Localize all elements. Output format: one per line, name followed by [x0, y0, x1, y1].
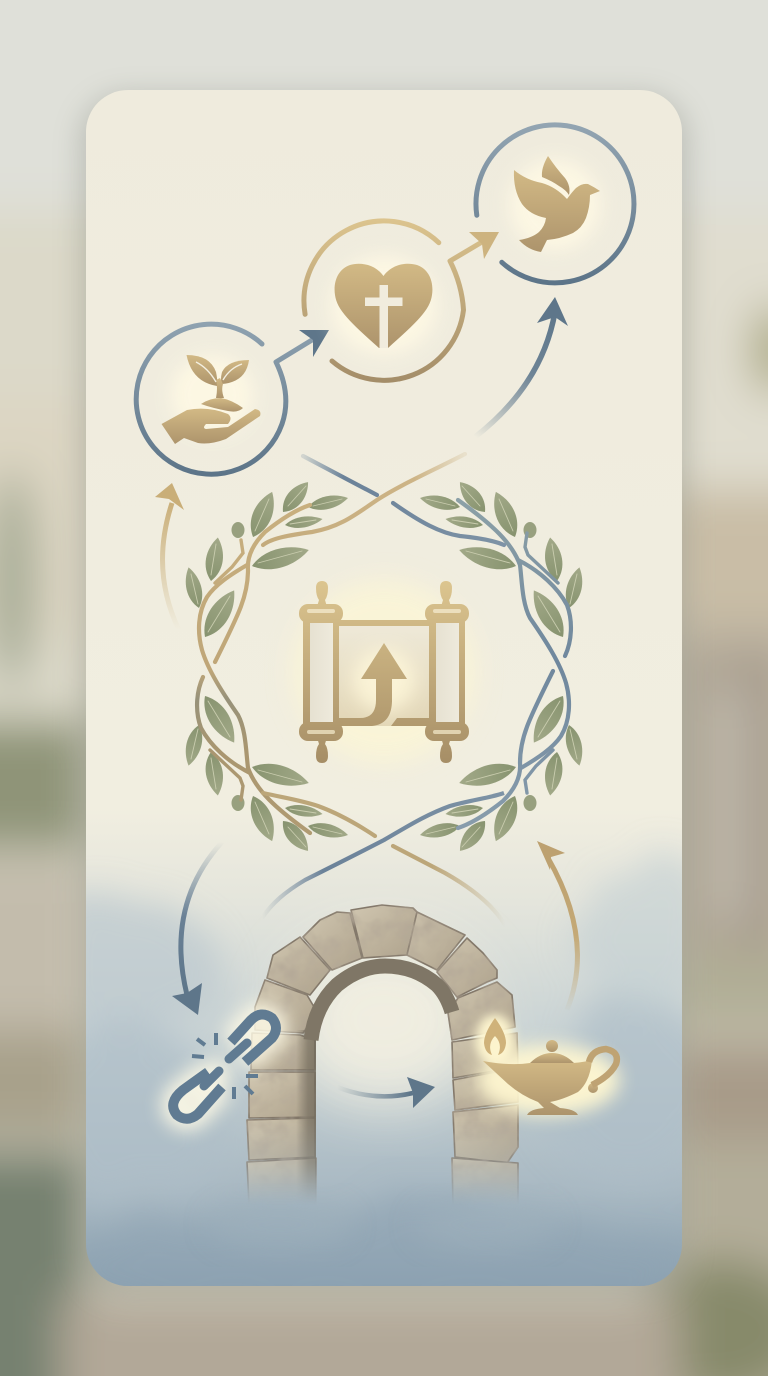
- arrowhead two: [469, 232, 499, 259]
- ring and arrow one: [136, 324, 312, 474]
- circle two: heart with cross: [304, 221, 499, 380]
- arrow on scroll: [361, 643, 407, 702]
- card shadow: [80, 94, 688, 1298]
- gold vines left: [197, 505, 310, 833]
- icon: heart: [335, 264, 432, 348]
- ring three: [476, 125, 634, 283]
- arch inner shadow: [298, 1030, 316, 1194]
- icon: oil lamp: [475, 1014, 620, 1116]
- blue ribbon top: [303, 456, 504, 545]
- central scroll: [292, 580, 476, 764]
- stone arch: [247, 905, 518, 1205]
- curved arrow to dove: [475, 297, 568, 437]
- sparks: [192, 1033, 258, 1099]
- fog clouds: [86, 847, 682, 1232]
- gold ribbon top: [263, 454, 465, 545]
- curved arrow to sprout circle: [155, 483, 184, 630]
- ribbons and wreath: [181, 454, 587, 925]
- icon: cross: [365, 285, 402, 348]
- blue vines right: [458, 500, 571, 828]
- panel: main card: [86, 90, 682, 1286]
- right roller: [425, 581, 469, 763]
- icon: broken chain: [173, 1014, 276, 1119]
- lamp body: [483, 1040, 598, 1115]
- gold ribbon bottom: [263, 793, 505, 925]
- ring and arrow two: [304, 221, 482, 380]
- icon: sprout and hand: [162, 355, 260, 444]
- olive leaves: [181, 477, 587, 856]
- circle three: dove: [476, 125, 634, 283]
- left roller: [299, 581, 343, 763]
- light glow inside arch: [284, 935, 484, 1105]
- curved arrow to broken chain: [172, 842, 222, 1015]
- blue ribbon bottom: [262, 793, 504, 918]
- flame: [484, 1018, 506, 1055]
- icon: dove: [514, 156, 600, 252]
- circle one: sprout in hand: [136, 324, 329, 474]
- upper link: [231, 1014, 276, 1062]
- arrowhead one: [299, 330, 329, 357]
- curved arrow from lamp: [537, 841, 577, 1010]
- lower link: [173, 1072, 222, 1119]
- middle arrow under arch: [337, 1077, 435, 1108]
- fog over arch base: [210, 1199, 555, 1251]
- scroll sheet: [336, 620, 432, 726]
